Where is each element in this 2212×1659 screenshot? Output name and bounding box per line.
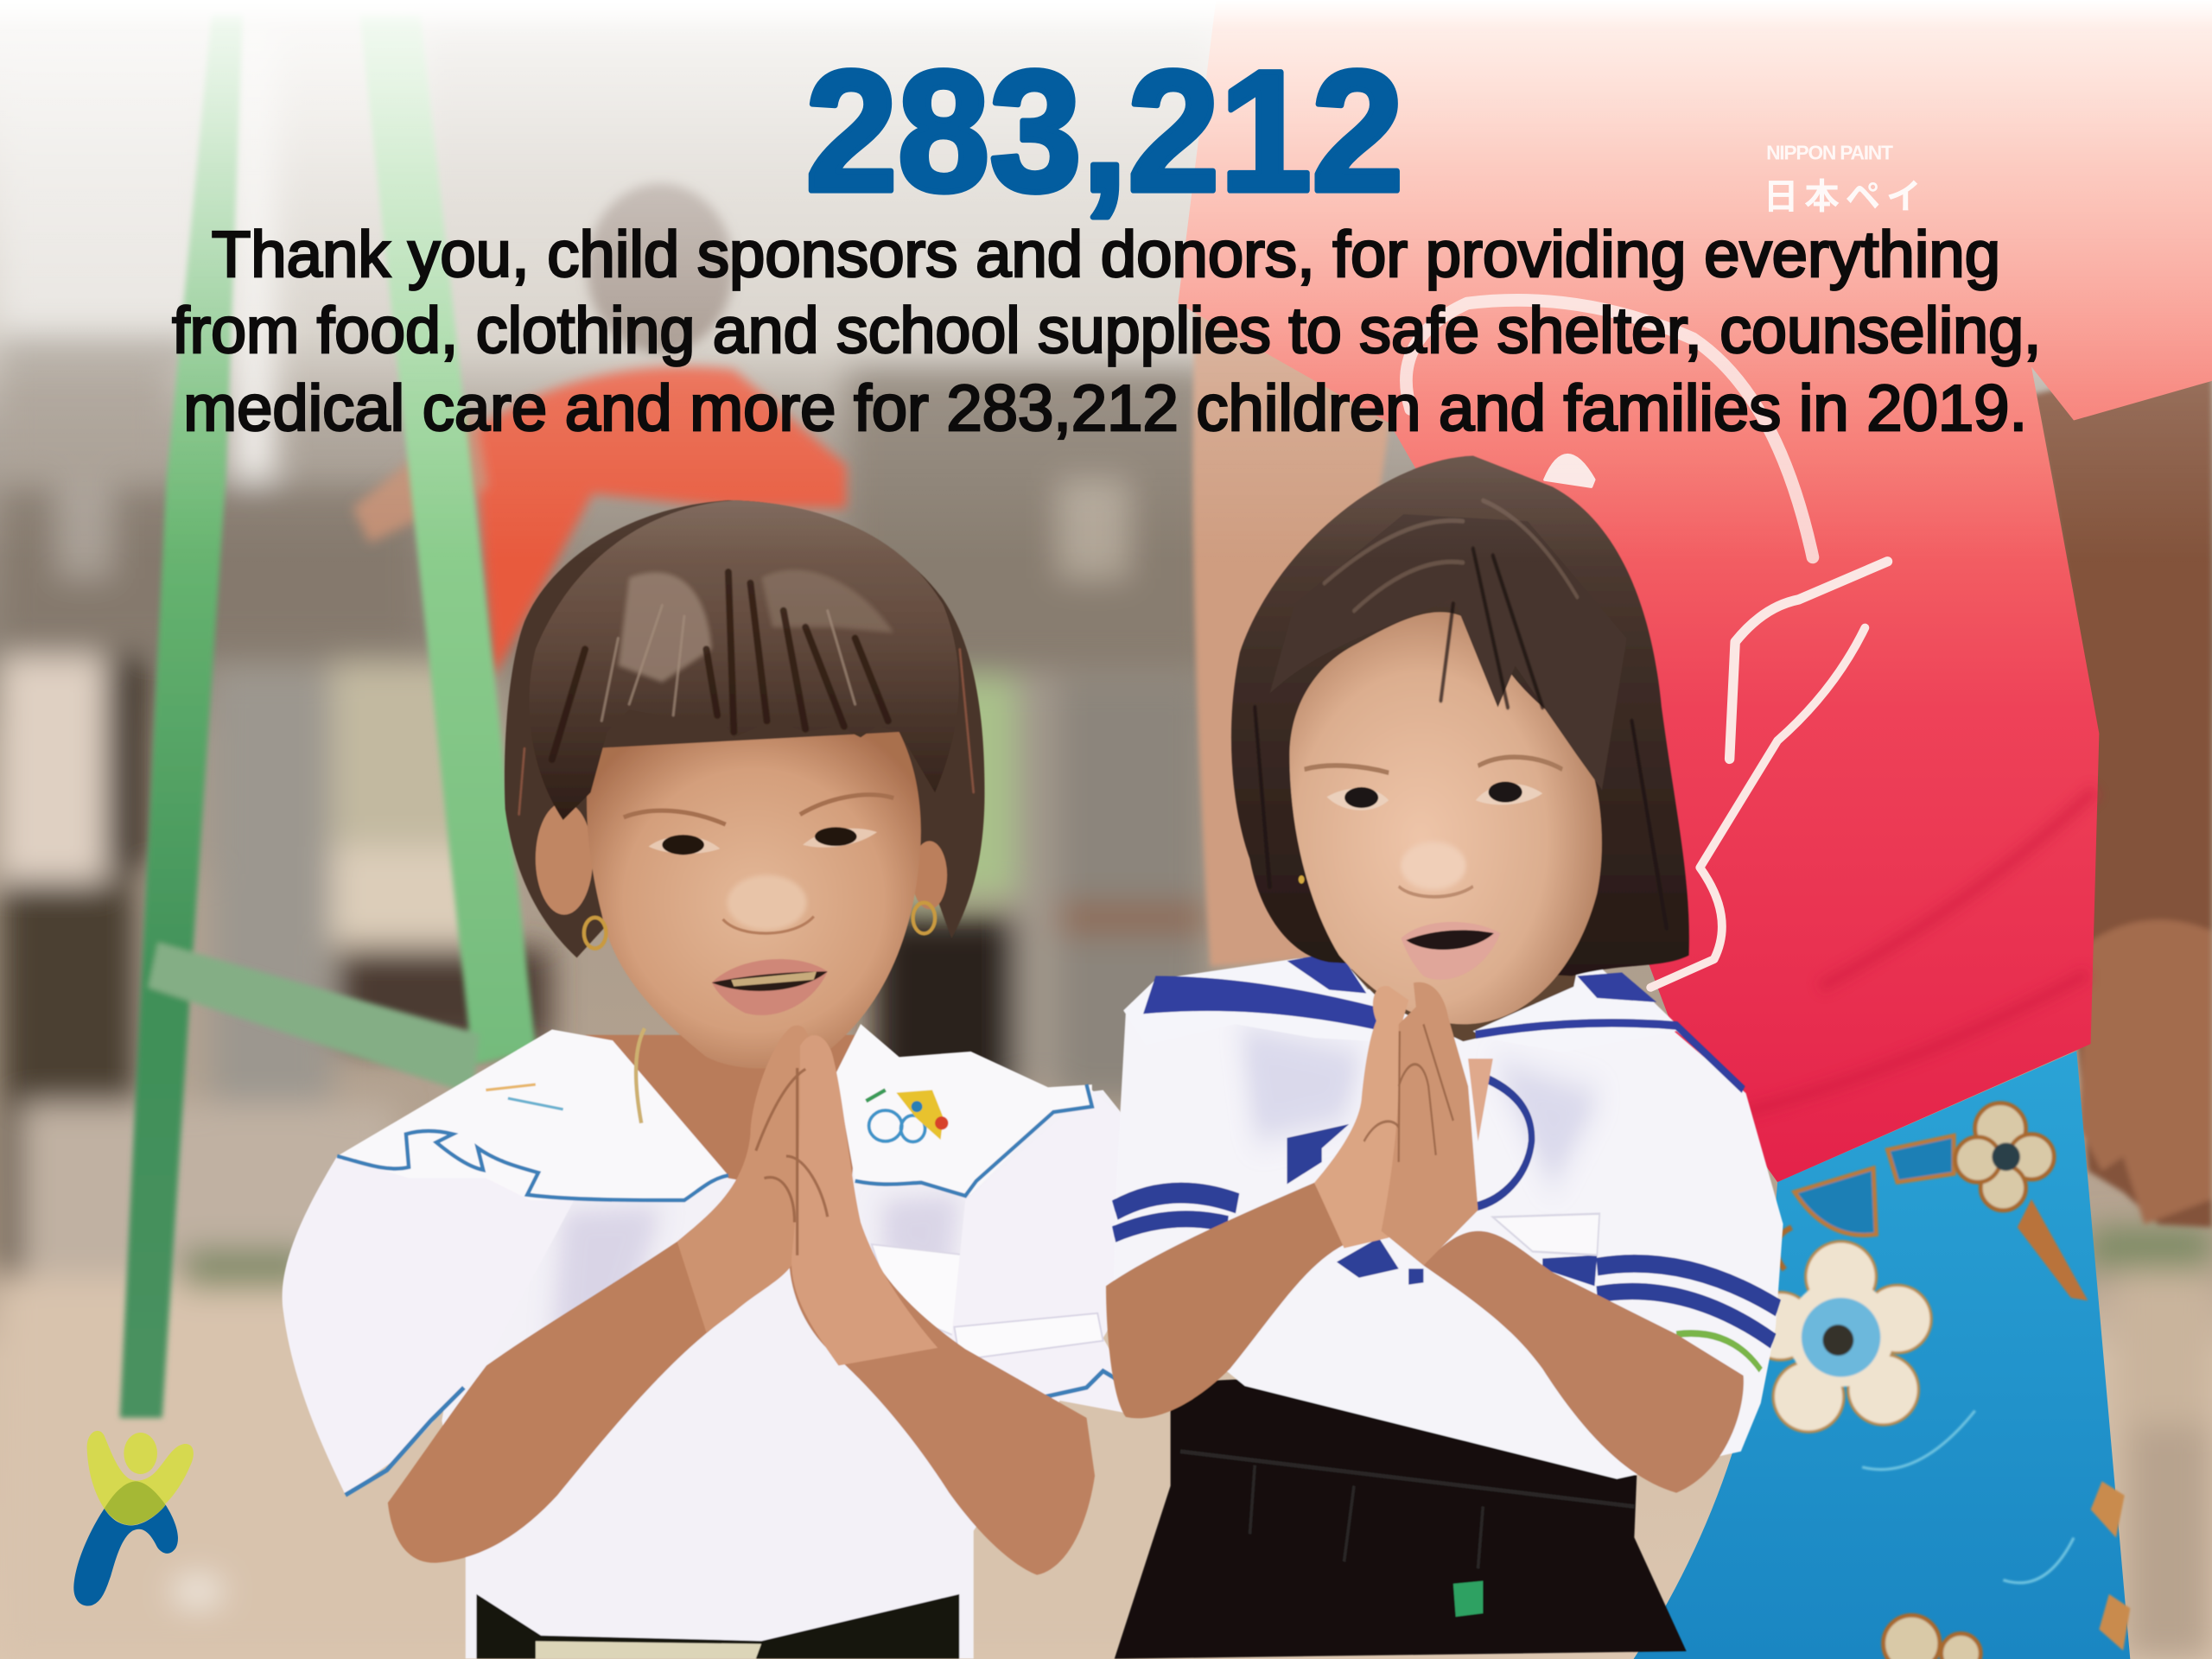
- right child face: [1289, 612, 1602, 1024]
- right child hair: [1231, 456, 1689, 976]
- pocket: [1493, 1214, 1599, 1255]
- green sleeve hem: [1676, 1333, 1761, 1370]
- hair highlights: [618, 570, 893, 683]
- right child left hand: [1314, 986, 1408, 1248]
- collar embroidery right: [866, 1090, 948, 1141]
- left child face: [587, 732, 921, 1069]
- left child: [283, 500, 1146, 1659]
- logo arms: [87, 1431, 194, 1525]
- right child fringe: [1269, 514, 1627, 790]
- print small lettering: 日本ペイ: [1764, 177, 1922, 217]
- shirt blue bow: [1287, 1124, 1597, 1286]
- finger detail: [756, 1068, 828, 1255]
- sleeve stripes: [1114, 1192, 1778, 1341]
- message line 2: from food, clothing and school supplies to safe shelter, counseling,: [172, 294, 2041, 366]
- left child left sleeve: [283, 1145, 574, 1495]
- left child right sleeve: [949, 1090, 1146, 1414]
- right child: [1106, 456, 1783, 1659]
- message line 3: medical care and more for 283,212 children and families in 2019.: [183, 372, 2027, 444]
- left child far arm: [789, 1200, 1095, 1575]
- adult arms: [1192, 283, 2212, 1227]
- right child nose: [1399, 842, 1473, 897]
- right child skirt: [1115, 1379, 1687, 1659]
- left child neck and chest: [585, 1035, 866, 1200]
- left child fringe: [529, 500, 959, 820]
- right child mouth: [1402, 922, 1500, 980]
- print small lettering: [1764, 141, 1922, 217]
- dress shadows: [552, 1195, 960, 1344]
- left child collar right: [836, 1024, 1092, 1195]
- print small lettering: NIPPON PAINT: [1766, 141, 1893, 163]
- background child in red shirt: [353, 183, 847, 677]
- right child neck: [1349, 969, 1577, 1041]
- thumb: [1468, 1058, 1493, 1141]
- right child right arm: [1423, 1231, 1744, 1493]
- green swing poles: [120, 14, 536, 1418]
- left child eyes: [624, 795, 893, 855]
- left child hand right: [791, 1035, 938, 1365]
- logo: running figure: [73, 1431, 194, 1606]
- right child sailor collar left: [1123, 956, 1376, 1045]
- left child hair back: [505, 500, 984, 957]
- left child earrings: [584, 903, 935, 949]
- adult red t-shirt: [1178, 0, 2212, 1182]
- logo head: [124, 1433, 157, 1474]
- earring: [1299, 875, 1305, 884]
- hair strands: [1255, 500, 1667, 928]
- headline number: 283,212: [805, 35, 1403, 227]
- left child necklace: [636, 1028, 645, 1123]
- shirt shadows: [1240, 1024, 1602, 1190]
- white fade across the top of the photo: [0, 0, 2212, 564]
- shirt white logo print: [1406, 300, 1887, 988]
- right child shirt body: [1114, 969, 1783, 1479]
- finger detail: [1364, 1024, 1453, 1162]
- left child near arm: [388, 1223, 734, 1563]
- right child eyes: [1305, 757, 1562, 810]
- adult blue floral skirt: [1634, 1051, 2130, 1659]
- logo overlap: [105, 1481, 166, 1525]
- hair strands: [519, 572, 974, 815]
- collar embroidery left: [486, 1084, 563, 1109]
- right child left arm: [1106, 1183, 1344, 1418]
- left child dress body: [442, 1090, 1125, 1659]
- left child black skirt: [476, 1594, 959, 1659]
- floral pattern: [1746, 1103, 2130, 1659]
- left child hand left: [677, 1026, 814, 1332]
- left child ears: [536, 803, 593, 915]
- adult standing on the right: [1178, 0, 2212, 1659]
- logo legs: [73, 1505, 178, 1606]
- left child mouth: [712, 959, 828, 1015]
- dress pocket band: [872, 1244, 968, 1338]
- small green tag: [1453, 1581, 1483, 1617]
- left child nose: [723, 875, 814, 933]
- message line 1: Thank you, child sponsors and donors, for providing everything: [212, 218, 2000, 290]
- shirt folds: [1735, 790, 2094, 1115]
- right child sailor collar right: [1473, 983, 1741, 1086]
- left child collar left: [337, 1029, 728, 1200]
- thank-you message: [172, 218, 2041, 444]
- right child right hand: [1382, 982, 1478, 1265]
